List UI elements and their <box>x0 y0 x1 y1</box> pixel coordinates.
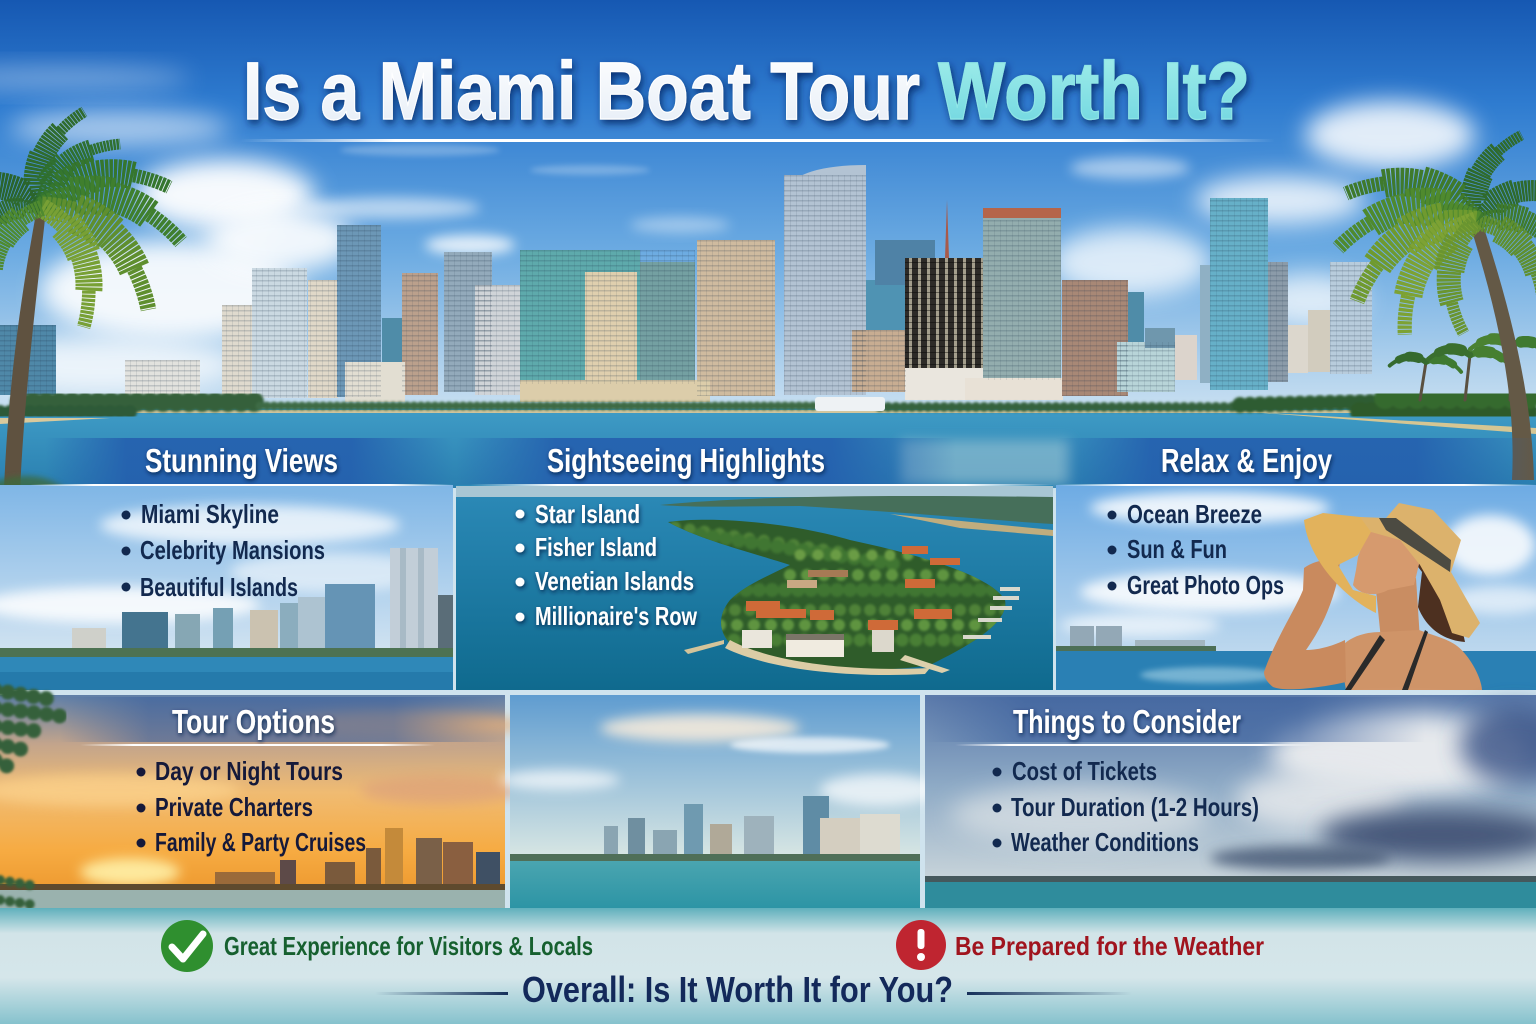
bullet list <box>516 499 698 631</box>
panel: stunning views <box>0 438 453 690</box>
island <box>660 520 1020 675</box>
tree foliage left edge <box>0 690 60 945</box>
hat crown and back brim <box>1360 503 1480 638</box>
bullet list <box>1108 499 1284 600</box>
icon: green check <box>161 920 213 972</box>
bullet list: Celebrity Mansions <box>140 535 325 565</box>
palm tree left <box>0 107 181 544</box>
bullet list: Sun & Fun <box>1127 534 1227 564</box>
shoreline trees <box>0 335 1536 434</box>
bullet list: Star Island <box>535 499 640 529</box>
woman with sun hat <box>1264 503 1482 690</box>
header band <box>925 697 1425 742</box>
panel: relax and enjoy <box>1056 438 1536 690</box>
bullet list: Cost of Tickets <box>1012 756 1157 786</box>
Miami skyline <box>0 165 1372 402</box>
palm tree right <box>1338 128 1536 480</box>
mini skyline <box>0 548 453 657</box>
bullet list: Great Photo Ops <box>1127 570 1284 600</box>
header band <box>60 697 505 742</box>
bullet list: Fisher Island <box>535 532 657 562</box>
sunset skyline <box>215 828 500 888</box>
bullet list: Day or Night Tours <box>155 756 343 786</box>
heading: Stunning Views <box>145 442 338 479</box>
bullet list <box>122 499 325 602</box>
bullet list: Family & Party Cruises <box>155 827 366 857</box>
panel: center harbor view <box>500 695 940 912</box>
bullet list: Miami Skyline <box>141 499 279 529</box>
panel: sightseeing highlights <box>456 438 1053 690</box>
heading: Tour Options <box>172 703 335 740</box>
hat brim underside <box>1304 513 1376 613</box>
verdict: positive: Great Experience for Visitors & Locals <box>224 931 593 961</box>
icon: red warning <box>896 920 946 970</box>
bullet list: Weather Conditions <box>1011 827 1199 857</box>
bullet list: Millionaire's Row <box>535 601 698 631</box>
bay water <box>0 408 1536 488</box>
bullet list: Ocean Breeze <box>1127 499 1262 529</box>
clouds <box>0 66 1475 393</box>
heading: Things to Consider <box>1013 703 1241 740</box>
bullet list <box>136 756 366 857</box>
header band <box>1056 438 1536 484</box>
header band <box>45 438 453 484</box>
heading: Sightseeing Highlights <box>547 442 825 479</box>
verdict: caution: Be Prepared for the Weather <box>955 931 1264 961</box>
sky background <box>0 0 1536 420</box>
bottom verdict strip <box>0 908 1536 1024</box>
heading: Relax & Enjoy <box>1161 442 1333 479</box>
hat band <box>1379 518 1451 572</box>
bullet list: Private Charters <box>155 792 313 822</box>
title: Is a Miami Boat Tour <box>243 46 920 137</box>
panel: tour options <box>0 695 520 912</box>
closing question: Overall: Is It Worth It for You? <box>522 969 953 1010</box>
bullet list: Beautiful Islands <box>140 572 298 602</box>
title rule <box>240 139 1275 142</box>
bullet list <box>992 756 1259 857</box>
panel: things to consider <box>925 695 1536 912</box>
header band <box>456 438 956 484</box>
title: Worth It? <box>938 46 1250 137</box>
bullet list: Venetian Islands <box>535 566 694 596</box>
decorative left line <box>375 992 508 995</box>
decorative right line <box>967 992 1132 995</box>
bullet list: Tour Duration (1-2 Hours) <box>1011 792 1259 822</box>
